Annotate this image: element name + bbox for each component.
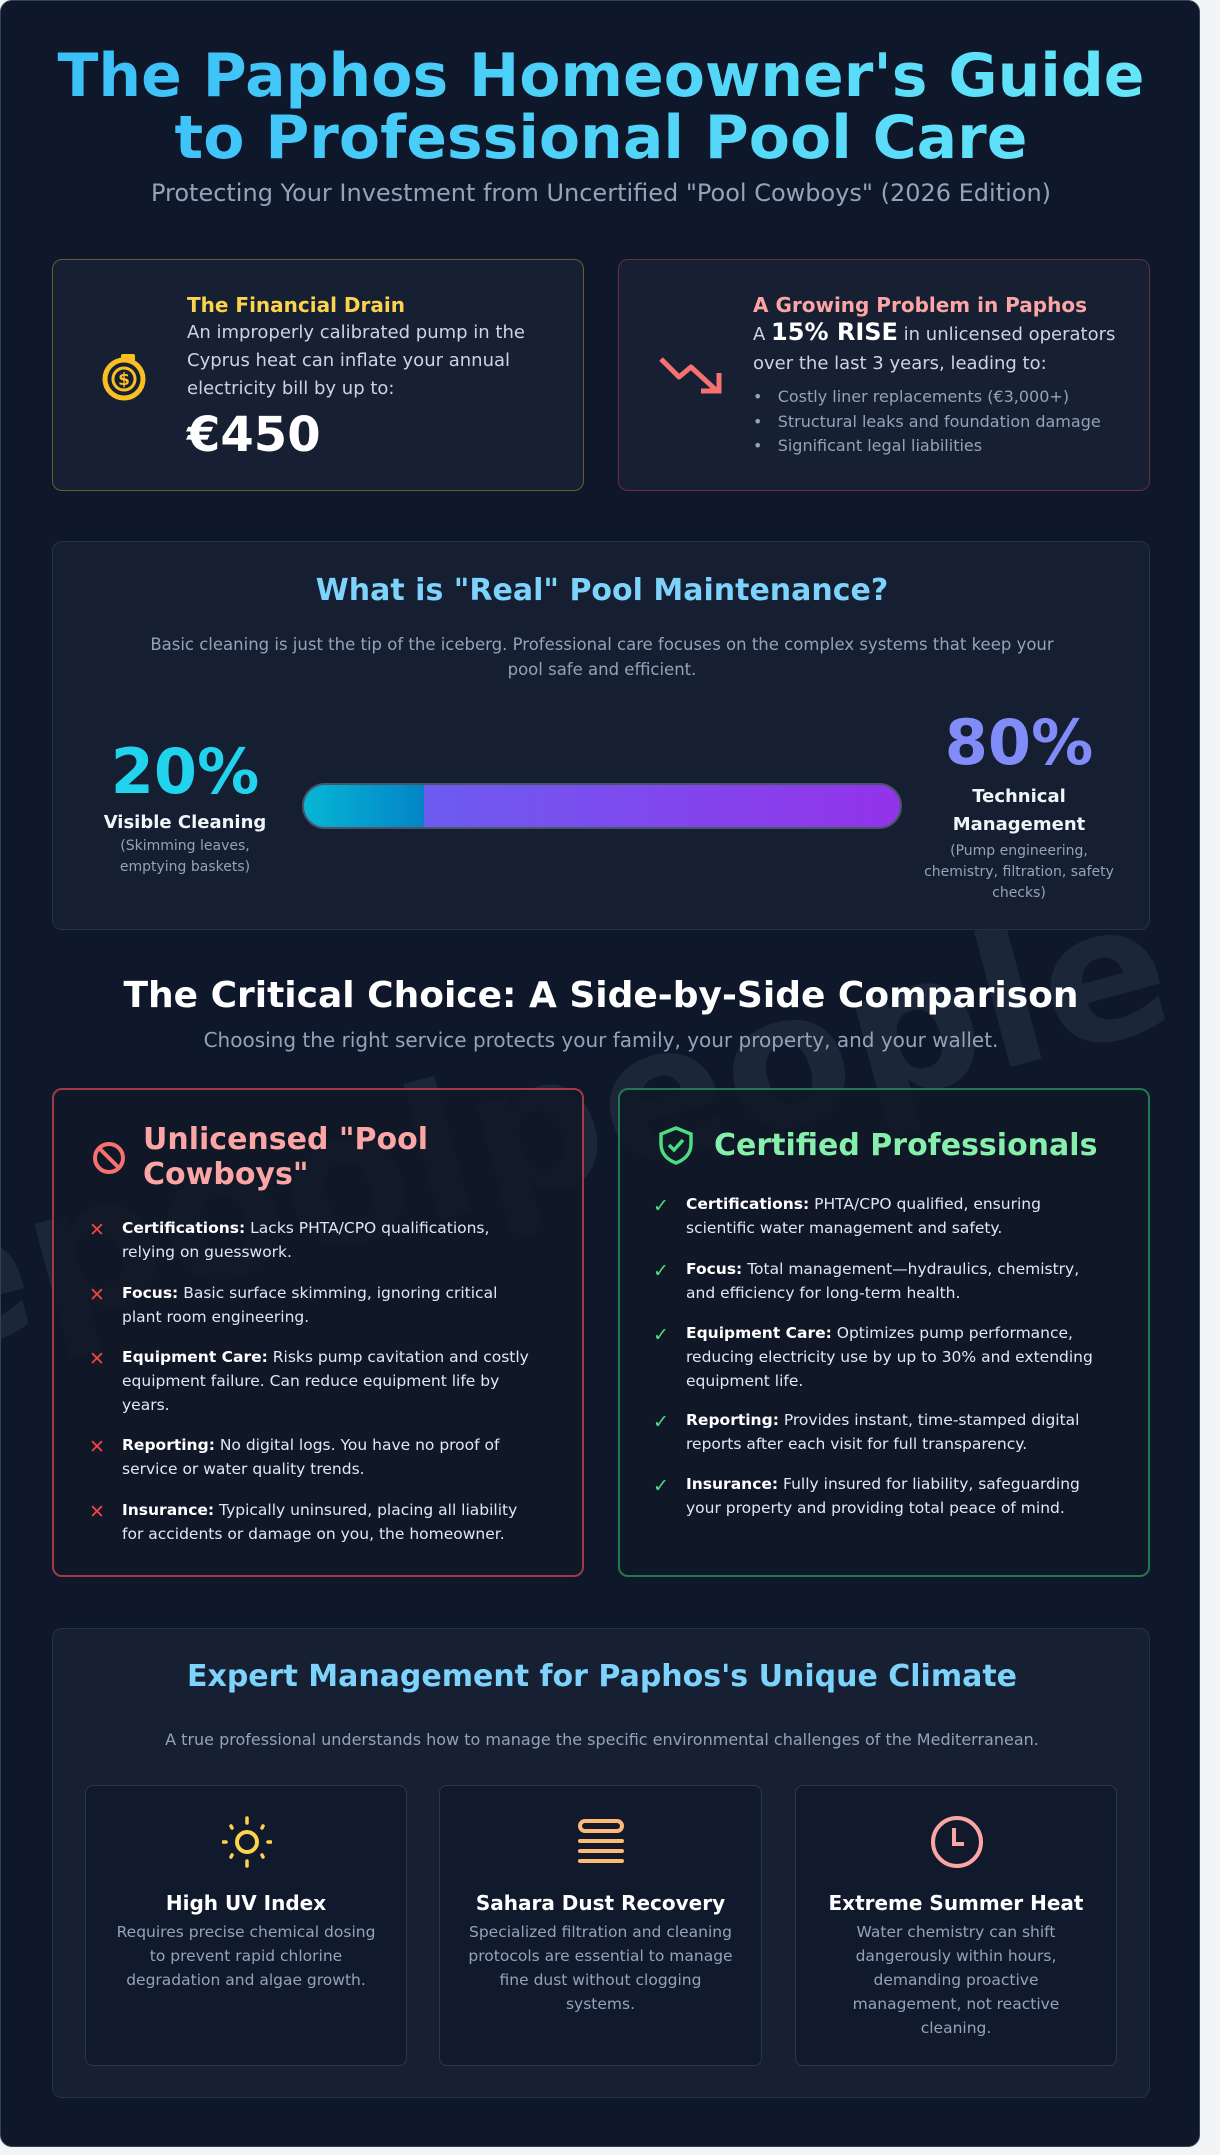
card: UV bbox=[85, 1785, 407, 2066]
stat: 20%: emptying baskets) bbox=[120, 859, 250, 875]
section heading: The Critical Choice: A Side-by-Side Comparison bbox=[123, 975, 1079, 1016]
card: heat: Extreme Summer Heat bbox=[828, 1891, 1084, 1915]
description: Basic cleaning is just the tip of the iceberg. Professional care focuses on the complex systems that keep your pool safe and efficient. bbox=[150, 635, 1054, 679]
text: growing problem: A Growing Problem in Paphos bbox=[753, 293, 1087, 317]
stat: 80%: 80% bbox=[945, 706, 1093, 779]
card: dust: Specialized filtration and cleaning protocols are essential to manage fine dust without clogging systems. bbox=[468, 1923, 733, 2013]
panel: financial drain bbox=[52, 259, 584, 491]
stat: 20% bbox=[104, 735, 266, 875]
text: growing problem bbox=[753, 293, 1115, 455]
panel: certified: Focus: Total management—hydraulics, chemistry, and efficiency for long-term health. bbox=[686, 1260, 1079, 1302]
text: growing problem: A 15% RISE in unlicensed operators over the last 3 years, leading to: bbox=[753, 318, 1115, 374]
panel: unlicensed: Certifications: Lacks PHTA/CPO qualifications, relying on guesswork. bbox=[122, 1219, 489, 1261]
panel: certified: Certifications: PHTA/CPO qualified, ensuring scientific water management and safety. bbox=[686, 1195, 1041, 1237]
subtitle: Protecting Your Investment from Uncertified "Pool Cowboys" (2026 Edition) bbox=[151, 179, 1051, 207]
heading: unlicensed bbox=[143, 1122, 428, 1192]
title: to Professional Pool Care bbox=[175, 103, 1027, 173]
icon: clock bbox=[931, 1816, 983, 1868]
panel: real maintenance bbox=[52, 541, 1150, 930]
icon: sun bbox=[222, 1816, 272, 1868]
stat: 80% bbox=[924, 706, 1114, 901]
list: unlicensed bbox=[89, 1219, 529, 1543]
text: financial drain: The Financial Drain bbox=[187, 293, 405, 317]
panel: certified: ✓ bbox=[653, 1411, 669, 1433]
card: heat: Water chemistry can shift dangerously within hours, demanding proactive management, not reactive cleaning. bbox=[853, 1923, 1059, 2037]
panel: certified: ✓ bbox=[653, 1260, 669, 1282]
panel: unlicensed: Focus: Basic surface skimming, ignoring critical plant room engineering. bbox=[122, 1284, 497, 1326]
list: certified bbox=[653, 1195, 1093, 1517]
bar chart bbox=[302, 783, 902, 829]
panel: unlicensed: ✕ bbox=[89, 1436, 105, 1458]
card: heat bbox=[795, 1785, 1117, 2066]
panel: certified: Equipment Care: Optimizes pump performance, reducing electricity use by up to 30% and extending equipment life. bbox=[686, 1324, 1093, 1390]
title bbox=[1, 45, 1201, 169]
panel: unlicensed: Reporting: No digital logs. You have no proof of service or water quality trends. bbox=[122, 1436, 499, 1478]
title: The Paphos Homeowner's Guide bbox=[57, 41, 1144, 111]
panel: certified: Reporting: Provides instant, time-stamped digital reports after each visit for full transparency. bbox=[686, 1411, 1079, 1453]
text: growing problem: • Costly liner replacements (€3,000+) bbox=[753, 387, 1069, 406]
icon: coin: $ bbox=[118, 370, 130, 390]
card: dust bbox=[439, 1785, 762, 2066]
text: financial drain: €450 bbox=[187, 407, 321, 463]
panel: certified: Insurance: Fully insured for liability, safeguarding your property and providing total peace of mind. bbox=[686, 1475, 1080, 1517]
panel: unlicensed: ✕ bbox=[89, 1284, 105, 1306]
stat: 80%: Management bbox=[953, 814, 1085, 835]
text: growing problem: • Structural leaks and foundation damage bbox=[753, 412, 1101, 430]
description: climate: A true professional understands how to manage the specific environmental challenges of the Mediterranean. bbox=[165, 1730, 1039, 1749]
panel: climate bbox=[52, 1628, 1150, 2098]
icon: prohibited bbox=[93, 1142, 125, 1174]
stat: 20%: (Skimming leaves, bbox=[120, 838, 250, 854]
icon: filter bbox=[578, 1819, 624, 1863]
stat: 20%: Visible Cleaning bbox=[104, 812, 266, 833]
icon: trend down bbox=[659, 357, 722, 394]
card: UV: Requires precise chemical dosing to prevent rapid chlorine degradation and algae growth. bbox=[117, 1923, 375, 1989]
heading: unlicensed: Unlicensed "Pool bbox=[143, 1122, 428, 1157]
stat: 80%: Technical bbox=[972, 786, 1066, 807]
text: growing problem: • Significant legal liabilities bbox=[753, 436, 982, 455]
section subtitle: Choosing the right service protects your family, your property, and your wallet. bbox=[204, 1028, 998, 1052]
heading: climate: Expert Management for Paphos's Unique Climate bbox=[187, 1659, 1017, 1694]
panel: unlicensed bbox=[52, 1088, 584, 1577]
panel: certified: ✓ bbox=[653, 1475, 669, 1497]
panel: unlicensed: ✕ bbox=[89, 1348, 105, 1370]
card: dust: Sahara Dust Recovery bbox=[476, 1891, 725, 1915]
icon: shield bbox=[659, 1126, 693, 1165]
icon: coin bbox=[102, 354, 146, 400]
stat: 20%: 20% bbox=[111, 735, 259, 808]
panel: certified: ✓ bbox=[653, 1195, 669, 1217]
panel: unlicensed: ✕ bbox=[89, 1219, 105, 1241]
panel: unlicensed: Equipment Care: Risks pump cavitation and costly equipment failure. Can reduce equipment life by years. bbox=[122, 1348, 529, 1414]
panel: certified bbox=[618, 1088, 1150, 1577]
heading: What is "Real" Pool Maintenance? bbox=[316, 573, 888, 608]
stat: 80%: (Pump engineering, chemistry, filtration, safety checks) bbox=[924, 843, 1114, 901]
panel: certified: ✓ bbox=[653, 1324, 669, 1346]
panel: unlicensed: Insurance: Typically uninsured, placing all liability for accidents or damage on you, the homeowner. bbox=[122, 1501, 517, 1543]
text: financial drain: An improperly calibrated pump in the Cyprus heat can inflate your annual electricity bill by up to: bbox=[187, 322, 525, 399]
panel: unlicensed: ✕ bbox=[89, 1501, 105, 1523]
card: UV: High UV Index bbox=[166, 1891, 326, 1915]
text: financial drain bbox=[186, 293, 525, 463]
heading: certified: Certified Professionals bbox=[714, 1128, 1097, 1163]
heading: unlicensed: Cowboys" bbox=[143, 1157, 308, 1192]
panel: growing problem bbox=[618, 259, 1150, 491]
